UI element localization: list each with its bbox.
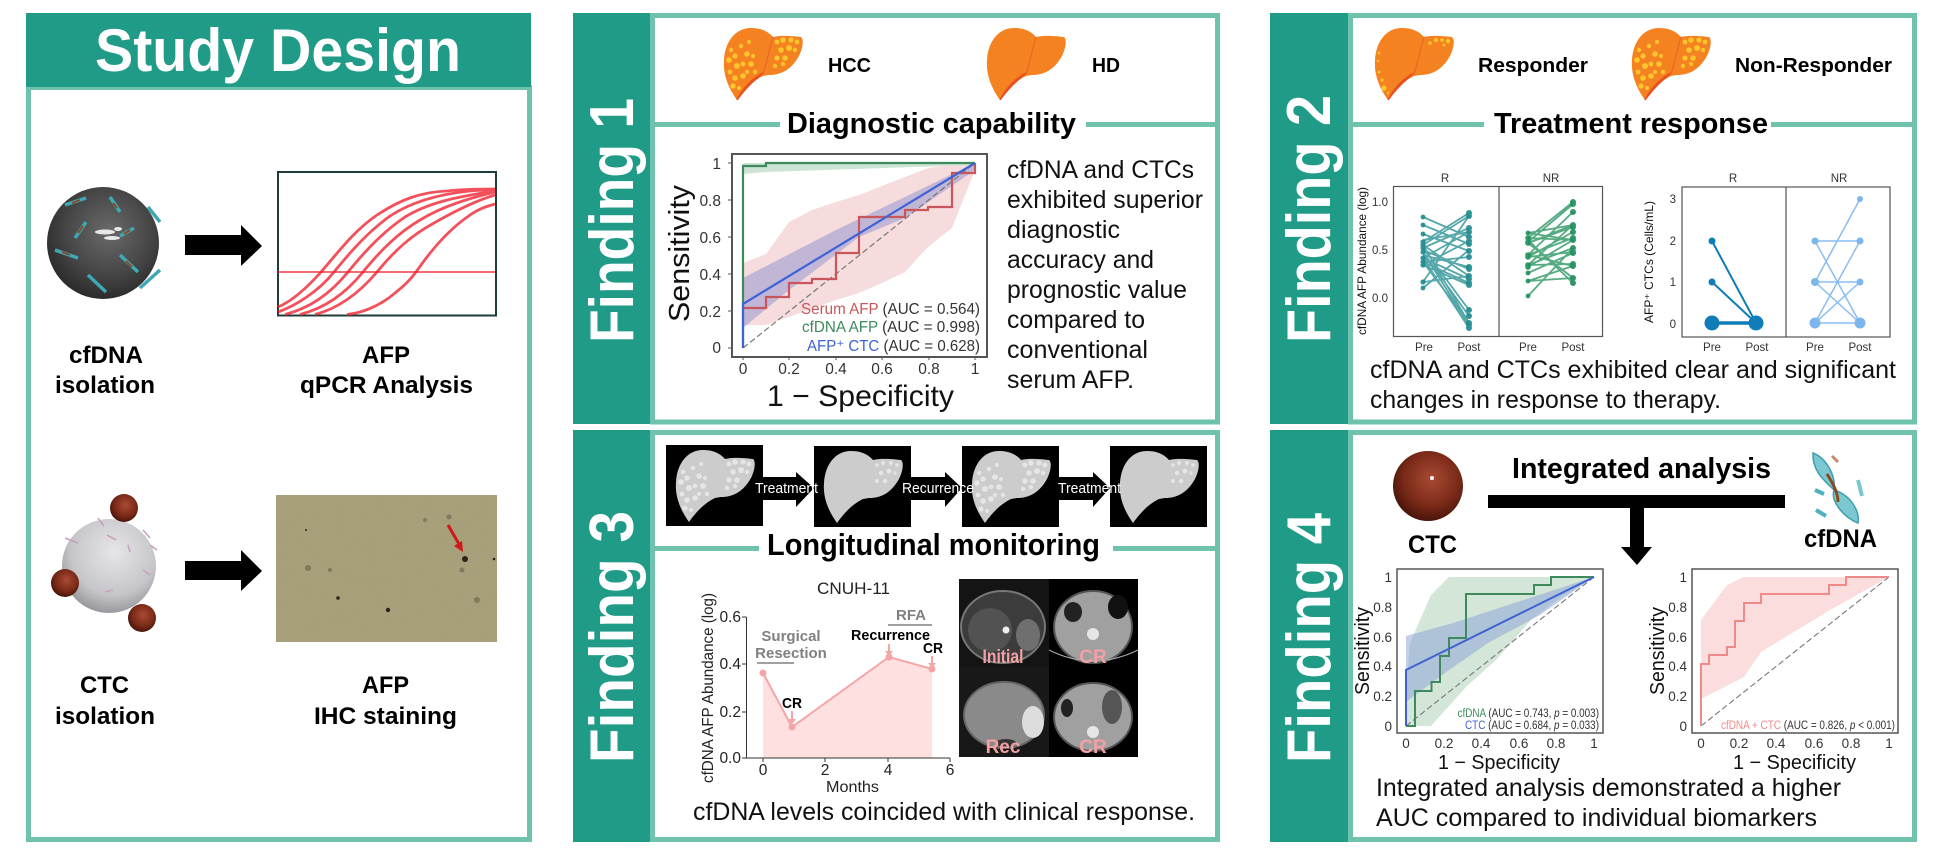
chart: ROC combined: 0.6 xyxy=(1668,630,1687,645)
image: AFP IHC micrograph xyxy=(276,495,497,642)
stage 4: treated liver xyxy=(1110,446,1207,527)
arrow labels: Recurrence xyxy=(902,480,974,497)
text: finding 1 summary: prognostic value xyxy=(1007,276,1187,304)
study design body frame xyxy=(28,88,530,840)
chart: cfDNA AFP paired plot: Pre xyxy=(1415,342,1433,354)
icon: cfDNA particle xyxy=(47,187,160,299)
panel: finding 2 xyxy=(1270,13,1914,424)
label: CTC isolation xyxy=(55,672,155,730)
finding 1 vertical label: Finding 1 xyxy=(578,98,647,343)
label: cfDNA: cfDNA xyxy=(1804,525,1877,553)
divider left xyxy=(650,122,780,127)
stage 3: recurrent liver xyxy=(962,446,1059,527)
image: CT scans: Initial xyxy=(982,647,1024,668)
divider right xyxy=(1113,546,1219,551)
chart: ROC individual biomarkers: 0.8 xyxy=(1547,736,1565,751)
chart: ROC individual biomarkers: 0 xyxy=(1402,736,1410,751)
chart: ROC diagnostic: 0.2 xyxy=(699,304,721,321)
chart: ROC diagnostic: Serum AFP (AUC = 0.564) xyxy=(801,301,980,318)
heading: Integrated analysis: Integrated analysis xyxy=(1512,453,1771,485)
image: CT scans xyxy=(959,579,1138,758)
icon: DNA helix xyxy=(1813,453,1862,523)
chart: AFP+ CTC paired plot: 2 xyxy=(1670,236,1676,248)
finding 1 sidebar xyxy=(573,13,650,424)
chart: ROC individual biomarkers: 1 xyxy=(1590,736,1598,751)
chart: ROC combined: 0 xyxy=(1679,719,1687,734)
text: finding 1 summary: cfDNA and CTCs xyxy=(1007,156,1194,184)
chart: ROC diagnostic: 0.4 xyxy=(825,361,847,378)
chart: CNUH-11 time course: 0.2 xyxy=(719,704,741,721)
chart: ROC diagnostic: 0.4 xyxy=(699,267,721,284)
finding 4 sidebar xyxy=(1270,430,1348,842)
chart: ROC diagnostic xyxy=(664,154,987,413)
label: Responder: Responder xyxy=(1478,55,1588,77)
finding 4 frame xyxy=(1350,432,1914,840)
chart: CNUH-11 time course: Months xyxy=(826,779,879,796)
label: AFP qPCR Analysis xyxy=(300,342,473,399)
stage 2: treated liver xyxy=(814,446,911,527)
chart: ROC individual biomarkers: 1 xyxy=(1384,570,1392,585)
chart: CNUH-11 time course: 0.0 xyxy=(719,750,741,767)
panel: study design xyxy=(26,13,531,840)
chart: CNUH-11 time course: 0.4 xyxy=(719,656,741,673)
text: finding 4 summary xyxy=(1376,774,1841,832)
chart: ROC individual biomarkers: Sensitivity xyxy=(1352,607,1374,695)
chart: ROC individual biomarkers: 0.8 xyxy=(1373,600,1392,615)
chart: ROC combined: 0.4 xyxy=(1767,736,1786,751)
chart: ROC diagnostic: 0 xyxy=(712,340,721,357)
icon: non-responder liver xyxy=(1632,28,1711,100)
chart: CNUH-11 time course: Surgical xyxy=(761,628,821,645)
label: AFP IHC staining: IHC staining xyxy=(314,703,457,730)
label: CTC isolation: isolation xyxy=(55,703,155,730)
chart: ROC combined: cfDNA + CTC (AUC = 0.826, p < 0.001) xyxy=(1721,720,1895,732)
chart: ROC diagnostic: 1 xyxy=(712,156,721,173)
chart: ROC individual biomarkers: 0.4 xyxy=(1373,659,1392,674)
chart: ROC diagnostic: 0.6 xyxy=(699,230,721,247)
chart: ROC individual biomarkers: 0.6 xyxy=(1373,630,1392,645)
liver timeline xyxy=(666,445,1207,527)
chart: cfDNA AFP paired plot: Post xyxy=(1457,342,1481,354)
label: AFP IHC staining xyxy=(314,672,457,730)
chart: cfDNA AFP paired plot: R xyxy=(1441,173,1449,185)
chart: ROC diagnostic: 0 xyxy=(739,361,748,378)
heading: Treatment response: Treatment response xyxy=(1494,108,1768,140)
arrow: CTC to IHC xyxy=(185,550,262,591)
chart: ROC individual biomarkers: 0.2 xyxy=(1373,689,1392,704)
chart: CNUH-11 time course: 0.6 xyxy=(719,609,741,626)
label: AFP qPCR Analysis: qPCR Analysis xyxy=(300,372,473,399)
chart: CNUH-11 time course: 4 xyxy=(884,762,893,779)
chart: cfDNA AFP paired plot: Post xyxy=(1561,342,1585,354)
arrow: combine into analysis xyxy=(1488,495,1785,565)
label: cfDNA isolation: cfDNA xyxy=(69,342,143,369)
chart: ROC combined xyxy=(1647,569,1898,774)
chart: AFP+ CTC paired plot: NR xyxy=(1831,173,1847,185)
label: HD: HD xyxy=(1092,55,1120,77)
chart: ROC combined: 0.2 xyxy=(1730,736,1748,751)
chart: ROC individual biomarkers: 0.4 xyxy=(1472,736,1491,751)
chart: ROC diagnostic: Sensitivity xyxy=(664,184,696,322)
chart: ROC diagnostic: AFP⁺ CTC (AUC = 0.628) xyxy=(807,338,980,355)
label: HCC: HCC xyxy=(828,55,871,77)
finding 3 sidebar xyxy=(573,430,650,842)
chart: AFP+ CTC paired plot: 3 xyxy=(1670,194,1676,206)
heading: Diagnostic capability: Diagnostic capability xyxy=(787,108,1076,140)
finding 3 frame xyxy=(652,432,1218,840)
chart: ROC diagnostic: cfDNA AFP (AUC = 0.998) xyxy=(802,319,980,336)
chart: CNUH-11 time course xyxy=(700,579,954,796)
finding 2 vertical label: Finding 2 xyxy=(1275,95,1344,343)
image: CT scans: Rec xyxy=(986,737,1021,758)
arrow: cfDNA to qPCR xyxy=(185,225,262,266)
divider right xyxy=(1771,122,1914,127)
chart: ROC diagnostic: 0.6 xyxy=(871,361,893,378)
chart: ROC combined: 1 xyxy=(1679,570,1687,585)
chart: ROC diagnostic: 0.2 xyxy=(778,361,800,378)
icon: responder liver xyxy=(1375,28,1454,100)
label: cfDNA isolation xyxy=(55,342,155,399)
label: AFP qPCR Analysis: AFP xyxy=(362,342,410,369)
text: finding 1 summary: diagnostic xyxy=(1007,216,1120,244)
panel: finding 1 xyxy=(573,13,1219,424)
panel: finding 3 xyxy=(573,430,1219,842)
chart: CNUH-11 time course: 2 xyxy=(821,762,829,779)
chart: cfDNA AFP paired plot xyxy=(1355,173,1602,354)
chart: CNUH-11 time course: 0 xyxy=(759,762,768,779)
arrow labels: Treatment xyxy=(755,480,819,497)
stage 1: diseased liver xyxy=(666,445,763,526)
arrow labels xyxy=(755,480,1122,497)
chart: CNUH-11 time course: Recurrence xyxy=(851,627,930,644)
arrow labels: Treatment xyxy=(1058,480,1122,497)
finding 2 sidebar xyxy=(1270,13,1348,424)
chart: ROC combined: 1 xyxy=(1885,736,1893,751)
divider left xyxy=(1348,122,1484,127)
chart: AFP+ CTC paired plot: Post xyxy=(1745,342,1769,354)
icon: CTC bead xyxy=(1393,451,1463,521)
text: finding 1 summary xyxy=(1007,156,1203,394)
study design header bar xyxy=(26,13,531,87)
chart: cfDNA AFP paired plot: Pre xyxy=(1519,342,1537,354)
heading: Longitudinal monitoring: Longitudinal monitoring xyxy=(767,527,1100,562)
finding 1 frame xyxy=(652,16,1218,422)
chart: CNUH-11 time course: 6 xyxy=(946,762,954,779)
chart: cfDNA AFP paired plot: cfDNA AFP Abundance (log) xyxy=(1355,187,1369,335)
chart: CNUH-11 time course: cfDNA AFP Abundance (log) xyxy=(700,593,717,783)
image: CT scans: CR xyxy=(1079,737,1107,758)
chart: cfDNA AFP paired plot: 0.5 xyxy=(1372,245,1388,257)
text: finding 1 summary: serum AFP. xyxy=(1007,366,1134,394)
chart: ROC individual biomarkers: CTC (AUC = 0.684, p = 0.033) xyxy=(1465,720,1599,732)
chart: ROC diagnostic: 1 − Specificity xyxy=(767,380,954,413)
text: finding 1 summary: conventional xyxy=(1007,336,1148,364)
chart: CNUH-11 time course: CNUH-11 xyxy=(817,579,890,598)
chart: ROC diagnostic: 0.8 xyxy=(699,193,721,210)
finding 2 frame xyxy=(1350,16,1914,422)
chart: ROC combined: 0.6 xyxy=(1805,736,1823,751)
chart: ROC individual biomarkers: 1 − Specificity xyxy=(1438,752,1560,774)
label: cfDNA isolation: isolation xyxy=(55,372,155,399)
finding 4 vertical label: Finding 4 xyxy=(1275,513,1344,763)
divider left xyxy=(650,546,759,551)
chart: AFP+ CTC paired plot: Post xyxy=(1848,342,1872,354)
text: finding 3 summary: cfDNA levels coincided with clinical response. xyxy=(693,798,1195,826)
text: finding 1 summary: accuracy and xyxy=(1007,246,1154,274)
chart: cfDNA AFP paired plot: 0.0 xyxy=(1372,293,1388,305)
chart: cfDNA AFP paired plot: 1.0 xyxy=(1372,197,1388,209)
label: CTC isolation: CTC xyxy=(80,672,129,699)
chart: cfDNA AFP paired plot: NR xyxy=(1543,173,1559,185)
chart: ROC combined: Sensitivity xyxy=(1647,607,1669,695)
chart: CNUH-11 time course: RFA xyxy=(896,607,926,624)
icon: CTC with beads xyxy=(51,494,157,632)
chart: CNUH-11 time course: Resection xyxy=(755,645,827,662)
chart: ROC individual biomarkers: 0 xyxy=(1384,719,1392,734)
text: finding 4 summary: AUC compared to individual biomarkers xyxy=(1376,804,1817,832)
chart: ROC combined: 0.4 xyxy=(1668,659,1687,674)
icon: HD liver xyxy=(987,28,1066,100)
text: finding 4 summary: Integrated analysis demonstrated a higher xyxy=(1376,774,1841,802)
text: finding 2 summary xyxy=(1370,356,1896,414)
label: AFP IHC staining: AFP xyxy=(362,672,409,699)
chart: AFP+ CTC paired plot: 0 xyxy=(1670,319,1676,331)
chart: ROC combined: 1 − Specificity xyxy=(1733,752,1856,774)
chart: qPCR amplification curves xyxy=(278,172,496,316)
chart: CNUH-11 time course: CR xyxy=(782,695,802,712)
chart: ROC combined: 0.2 xyxy=(1668,689,1687,704)
text: finding 1 summary: compared to xyxy=(1007,306,1145,334)
image: CT scans: CR xyxy=(1079,647,1107,668)
arrows between stages xyxy=(763,472,1110,507)
chart: CNUH-11 time course: CR xyxy=(923,640,943,657)
chart: ROC combined: 0 xyxy=(1697,736,1705,751)
chart: AFP+ CTC paired plot: Pre xyxy=(1806,342,1824,354)
chart: AFP+ CTC paired plot: 1 xyxy=(1670,277,1676,289)
divider right xyxy=(1086,122,1219,127)
chart: ROC diagnostic: 1 xyxy=(971,361,979,378)
icon: HCC liver xyxy=(724,28,803,100)
finding 3 vertical label: Finding 3 xyxy=(578,511,647,763)
chart: AFP+ CTC paired plot: R xyxy=(1729,173,1737,185)
text: finding 2 summary: cfDNA and CTCs exhibited clear and significant xyxy=(1370,356,1896,384)
heading: Study Design: Study Design xyxy=(95,17,461,84)
text: finding 1 summary: exhibited superior xyxy=(1007,186,1203,214)
chart: AFP+ CTC paired plot: AFP⁺ CTCs (Cells/mL) xyxy=(1642,201,1656,323)
chart: ROC individual biomarkers: cfDNA (AUC = 0.743, p = 0.003) xyxy=(1458,708,1599,720)
chart: ROC individual biomarkers: 0.2 xyxy=(1435,736,1453,751)
label: Non-Responder: Non-Responder xyxy=(1735,55,1892,77)
chart: AFP+ CTC paired plot: Pre xyxy=(1703,342,1721,354)
chart: ROC diagnostic: 0.8 xyxy=(918,361,940,378)
label: CTC: CTC xyxy=(1408,531,1457,559)
chart: AFP+ CTC paired plot xyxy=(1642,173,1890,354)
chart: ROC individual biomarkers: 0.6 xyxy=(1510,736,1528,751)
chart: ROC combined: 0.8 xyxy=(1668,600,1687,615)
chart: ROC individual biomarkers xyxy=(1352,569,1603,774)
panel: finding 4 xyxy=(1270,430,1914,842)
chart: ROC combined: 0.8 xyxy=(1842,736,1860,751)
text: finding 2 summary: changes in response to therapy. xyxy=(1370,386,1721,414)
